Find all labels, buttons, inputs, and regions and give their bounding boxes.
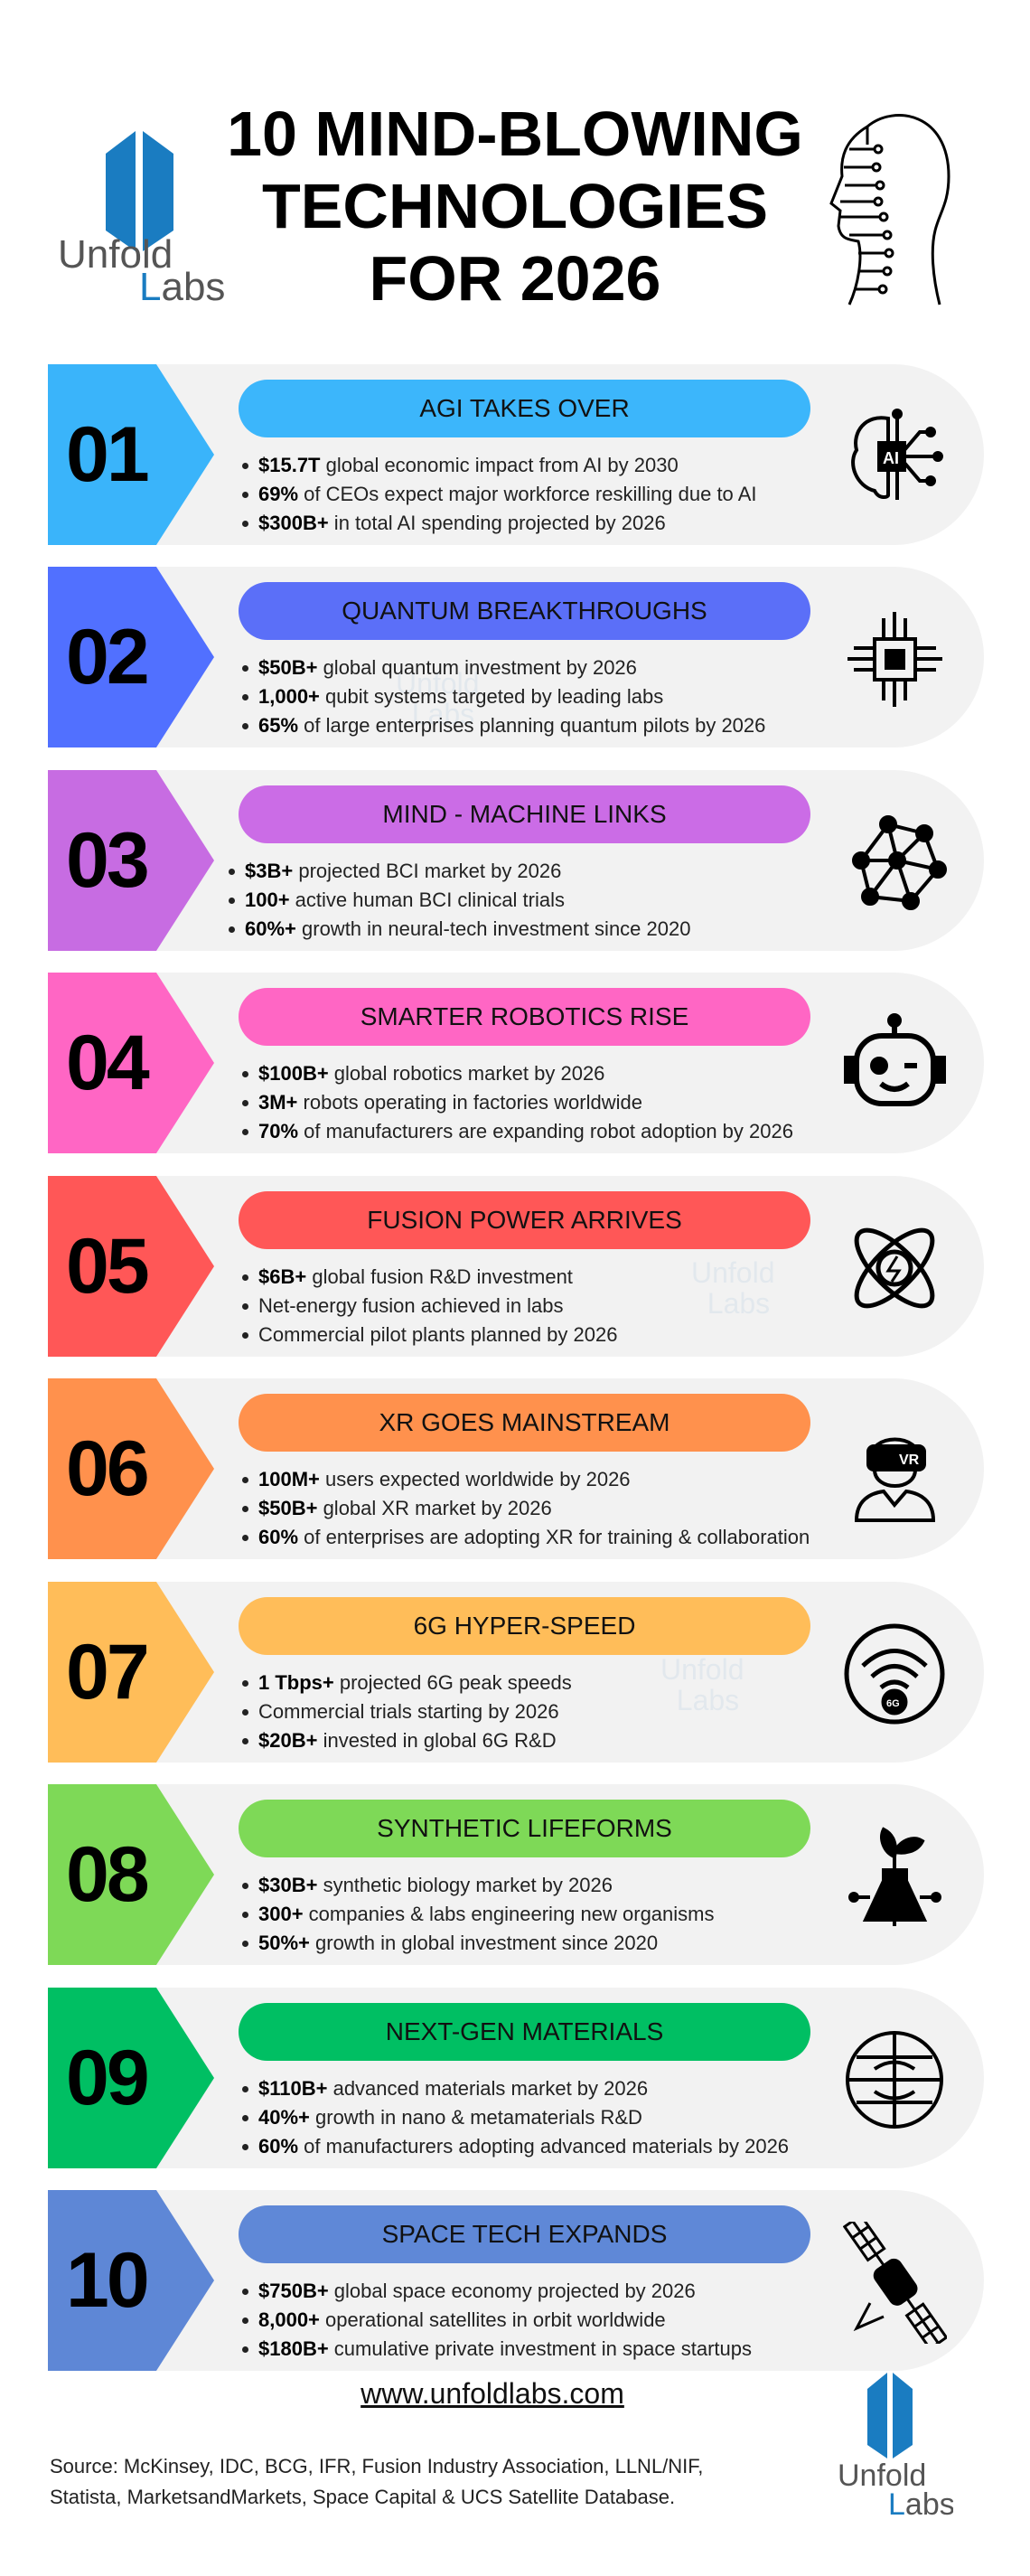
text block: BCI stats (229, 860, 690, 940)
heading: QUANTUM BREAKTHROUGHS: QUANTUM BREAKTHROUGHS (342, 597, 707, 625)
panel: 02 Quantum: Unfold (396, 667, 479, 700)
text block: AGI stats (242, 454, 756, 534)
text block: XR stats (242, 1468, 810, 1548)
heading: FUSION POWER ARRIVES (239, 1191, 810, 1249)
text block: space stats (242, 2280, 752, 2360)
text block: 6G stats: 1 Tbps+ projected 6G peak speeds (258, 1671, 572, 1694)
text block: synbio stats (242, 1874, 714, 1954)
heading: AGI TAKES OVER: AGI TAKES OVER (419, 394, 630, 422)
text block: XR stats: 60% of enterprises are adopting XR for training & collaboration (258, 1526, 810, 1548)
text block: AGI stats: $300B+ in total AI spending projected by 2026 (258, 512, 666, 534)
logo: Unfold Labs top (58, 131, 225, 307)
text block: quantum stats: 65% of large enterprises planning quantum pilots by 2026 (258, 714, 765, 737)
heading: 6G HYPER-SPEED (239, 1597, 810, 1655)
icon: VR headset person: VR (899, 1453, 920, 1468)
heading: SPACE TECH EXPANDS (239, 2205, 810, 2263)
text block: synbio stats: 50%+ growth in global investment since 2020 (258, 1932, 658, 1954)
text block: fusion stats: $6B+ global fusion R&D investment (258, 1265, 573, 1288)
panel: 05 Fusion: Unfold (691, 1256, 775, 1289)
panel: 04 Robotics (48, 973, 984, 1153)
panel: 07 6G (48, 1582, 984, 1763)
icon: globe (846, 2031, 943, 2129)
text block: AGI stats: $15.7T global economic impact from AI by 2030 (258, 454, 679, 476)
text block: 6G stats: Commercial trials starting by 2026 (258, 1700, 559, 1723)
title: FOR 2026 (370, 243, 660, 314)
heading: AGI TAKES OVER (239, 380, 810, 437)
panel: 07 6G: Unfold (660, 1653, 744, 1686)
panel: 08 Synthetic: 08 (66, 1831, 147, 1918)
icon: flask with plant (848, 1827, 941, 1926)
text block: BCI stats: 100+ active human BCI clinical trials (245, 888, 565, 911)
panel: 05 Fusion: Labs (707, 1287, 770, 1320)
icon: satellite (843, 2222, 947, 2344)
panel: 05 Fusion (48, 1176, 984, 1357)
logo: Unfold Labs bottom (838, 2373, 953, 2522)
text block: 6G stats (242, 1671, 572, 1752)
icon: VR headset person (855, 1437, 935, 1522)
text block: materials stats: 60% of manufacturers adopting advanced materials by 2026 (258, 2135, 789, 2158)
text block: XR stats: 100M+ users expected worldwide by 2026 (258, 1468, 631, 1490)
text block: synbio stats: $30B+ synthetic biology market by 2026 (258, 1874, 613, 1896)
heading: MIND - MACHINE LINKS: MIND - MACHINE LINKS (382, 800, 667, 828)
text block: robotics stats: 70% of manufacturers are expanding robot adoption by 2026 (258, 1120, 793, 1142)
heading: SYNTHETIC LIFEFORMS: SYNTHETIC LIFEFORMS (377, 1814, 672, 1842)
text block: quantum stats (242, 656, 765, 737)
heading: FUSION POWER ARRIVES: FUSION POWER ARRIVES (367, 1206, 682, 1234)
text block: synbio stats: 300+ companies & labs engineering new organisms (258, 1903, 714, 1925)
panel: 09 Materials: 09 (66, 2035, 147, 2121)
panel: 05 Fusion: 05 (66, 1223, 147, 1310)
panel: 01 AGI: 01 (66, 411, 147, 498)
logo: Unfold Labs bottom: Unfold (838, 2458, 926, 2493)
panel: 10 Space (48, 2190, 984, 2371)
panel: 06 XR: 06 (66, 1425, 147, 1512)
panel: 02 Quantum: Labs (412, 698, 474, 730)
icon: AI brain (851, 409, 943, 500)
icon: atom (855, 1227, 934, 1309)
heading: QUANTUM BREAKTHROUGHS (239, 582, 810, 640)
heading: SPACE TECH EXPANDS: SPACE TECH EXPANDS (382, 2220, 667, 2248)
panel: 07 6G: 07 (66, 1629, 147, 1716)
heading: NEXT-GEN MATERIALS: NEXT-GEN MATERIALS (386, 2017, 663, 2045)
text block: materials stats: $110B+ advanced materials market by 2026 (258, 2077, 648, 2100)
text block: BCI stats: $3B+ projected BCI market by 2026 (245, 860, 561, 882)
icon: chip (847, 612, 942, 707)
heading: 6G HYPER-SPEED: 6G HYPER-SPEED (414, 1612, 635, 1640)
icon: network (852, 815, 947, 910)
logo: Unfold Labs bottom: Labs (888, 2487, 953, 2522)
text block: space stats: 8,000+ operational satellites in orbit worldwide (258, 2308, 666, 2331)
logo: Unfold Labs top: Unfold (58, 232, 173, 277)
panel: 09 Materials (48, 1988, 984, 2168)
text block: materials stats: 40%+ growth in nano & metamaterials R&D (258, 2106, 642, 2129)
text block: 6G stats: $20B+ invested in global 6G R&D (258, 1729, 557, 1752)
panel: 01 AGI (48, 364, 984, 545)
panel: 07 6G: Labs (677, 1684, 739, 1716)
panel: 02 Quantum: 02 (66, 614, 147, 700)
text block: sources: Source: McKinsey, IDC, BCG, IFR, Fusion Industry Association, LLNL/NIF, (50, 2455, 703, 2477)
icon: wifi 6G: 6G (886, 1698, 900, 1709)
panel: 02 Quantum (48, 567, 984, 747)
heading: NEXT-GEN MATERIALS (239, 2003, 810, 2061)
icon: robot face (844, 1013, 946, 1106)
text block: robotics stats (242, 1062, 793, 1142)
panel: 03 Mind-Machine: 03 (66, 817, 147, 904)
title (227, 99, 803, 314)
text block: space stats: $180B+ cumulative private investment in space startups (258, 2337, 752, 2360)
text block: robotics stats: $100B+ global robotics market by 2026 (258, 1062, 604, 1085)
icon: circuit head (829, 114, 950, 306)
text block: fusion stats: Commercial pilot plants planned by 2026 (258, 1323, 617, 1346)
panel: 08 Synthetic (48, 1784, 984, 1965)
text block: fusion stats (242, 1265, 617, 1346)
heading: MIND - MACHINE LINKS (239, 785, 810, 843)
text block: quantum stats: $50B+ global quantum investment by 2026 (258, 656, 637, 679)
heading: SYNTHETIC LIFEFORMS (239, 1800, 810, 1857)
text block: AGI stats: 69% of CEOs expect major workforce reskilling due to AI (258, 483, 756, 505)
link: website: www.unfoldlabs.com (360, 2377, 624, 2410)
heading: XR GOES MAINSTREAM (239, 1394, 810, 1452)
text block: space stats: $750B+ global space economy projected by 2026 (258, 2280, 696, 2302)
title: TECHNOLOGIES (262, 171, 768, 241)
panel: 03 Mind-Machine (48, 770, 984, 951)
text block: BCI stats: 60%+ growth in neural-tech investment since 2020 (245, 917, 690, 940)
title: 10 MIND-BLOWING (227, 99, 803, 169)
heading: XR GOES MAINSTREAM: XR GOES MAINSTREAM (379, 1408, 670, 1436)
text block: quantum stats: 1,000+ qubit systems targeted by leading labs (258, 685, 663, 708)
text block: fusion stats: Net-energy fusion achieved in labs (258, 1294, 564, 1317)
text block: sources: Statista, MarketsandMarkets, Space Capital & UCS Satellite Database. (50, 2486, 675, 2508)
text block: sources (50, 2455, 703, 2508)
text block: XR stats: $50B+ global XR market by 2026 (258, 1497, 552, 1519)
text block: materials stats (242, 2077, 789, 2158)
heading: SMARTER ROBOTICS RISE: SMARTER ROBOTICS RISE (360, 1002, 688, 1030)
text block: robotics stats: 3M+ robots operating in factories worldwide (258, 1091, 642, 1114)
panel: 10 Space: 10 (66, 2237, 147, 2324)
heading: SMARTER ROBOTICS RISE (239, 988, 810, 1046)
panel: 06 XR (48, 1378, 984, 1559)
icon: AI brain: AI (883, 449, 899, 467)
panel: 04 Robotics: 04 (66, 1020, 147, 1106)
icon: wifi 6G (844, 1623, 945, 1725)
